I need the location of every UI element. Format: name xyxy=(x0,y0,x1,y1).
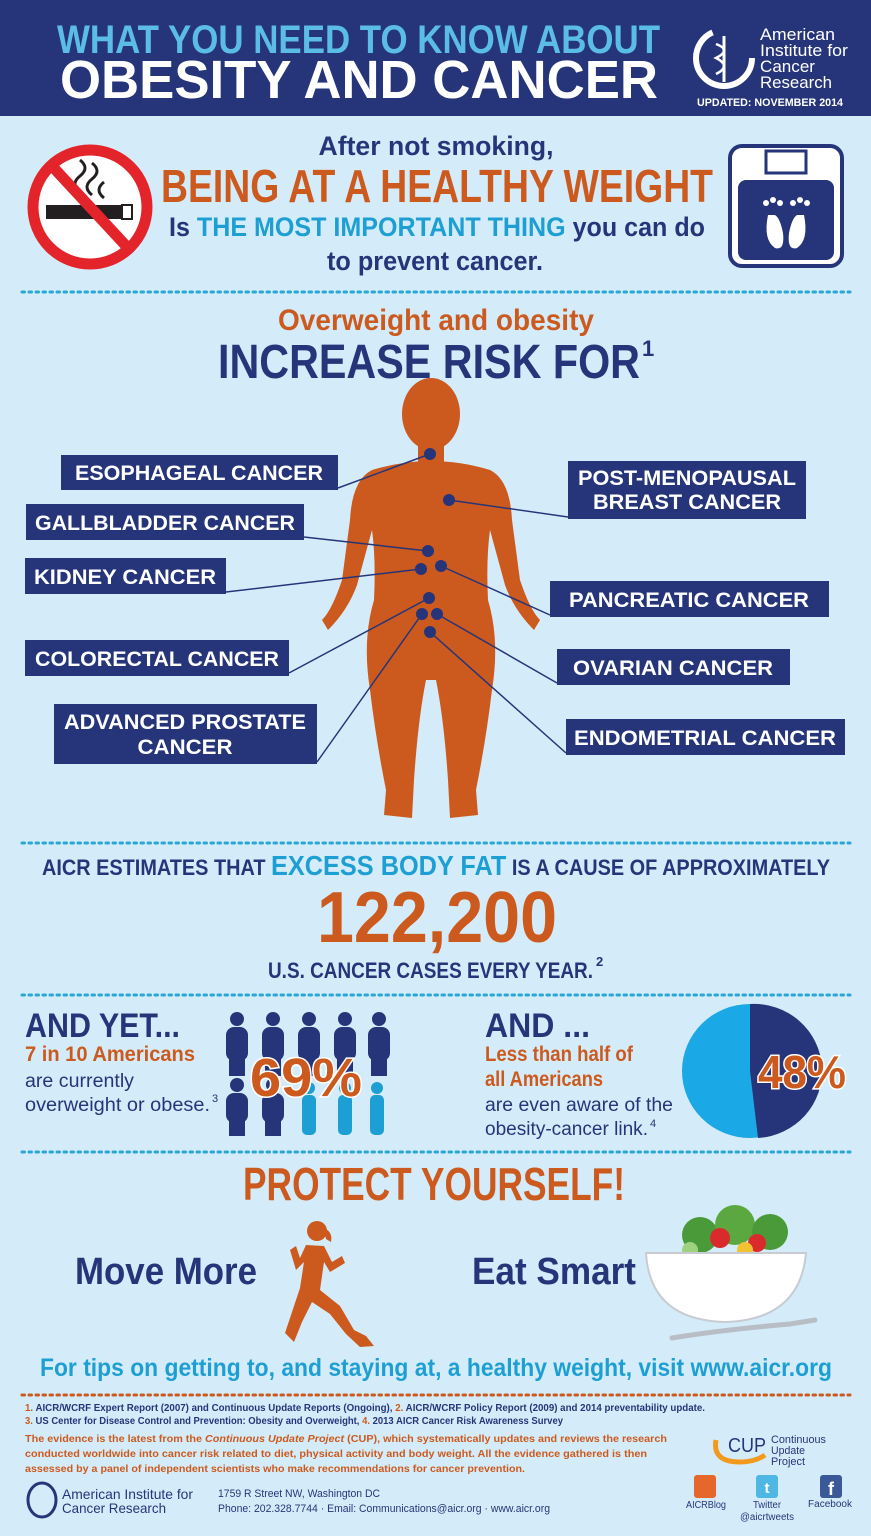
heading: increase risk xyxy=(218,304,654,389)
panel: 48% aware xyxy=(485,1004,846,1140)
footer AICR logo and address: American Institute for xyxy=(62,1486,193,1502)
connector lines xyxy=(226,454,568,762)
CUP logo: Project xyxy=(771,1456,805,1468)
label: post-menopausal breast cancer: BREAST CANCER xyxy=(593,491,781,514)
label: colorectal cancer xyxy=(25,640,289,676)
heading: protect yourself: PROTECT YOURSELF! xyxy=(243,1158,625,1210)
panel: 48% aware: AND ... xyxy=(485,1007,590,1045)
social icons: @aicrtweets xyxy=(740,1512,794,1523)
footnotes: 1. AICR/WCRF Expert Report (2007) and Continuous Update Reports (Ongoing), 2. AICR/WCRF Policy Report (2009) and 2014 preventability update. xyxy=(25,1403,705,1414)
label: advanced prostate cancer: ADVANCED PROSTATE xyxy=(64,711,306,734)
footer AICR logo and address: 1759 R Street NW, Washington DC xyxy=(218,1488,380,1500)
intro text: BEING AT A HEALTHY WEIGHT xyxy=(161,160,713,212)
intro text: Is THE MOST IMPORTANT THING you can do xyxy=(169,212,705,242)
panel: 69% overweight: 3 xyxy=(212,1093,218,1105)
label: endometrial cancer xyxy=(566,719,845,755)
pie chart: 48% xyxy=(758,1046,846,1098)
title xyxy=(57,18,660,110)
panel: 69% overweight xyxy=(25,1007,390,1136)
statistic: 122,200 cases: U.S. CANCER CASES EVERY YEAR. xyxy=(268,958,593,983)
panel: 48% aware: 4 xyxy=(650,1118,656,1130)
label: gallbladder cancer xyxy=(26,504,304,540)
heading: increase risk: Overweight and obesity xyxy=(278,304,594,337)
social icons: f xyxy=(828,1479,835,1499)
AICR logo: Institute for xyxy=(760,41,848,60)
CUP logo: Continuous xyxy=(771,1434,826,1446)
icon: scale xyxy=(730,146,842,266)
icon: no smoking xyxy=(33,150,147,264)
panel: 69% overweight: overweight or obese. xyxy=(25,1095,210,1116)
panel: 48% aware: all Americans xyxy=(485,1068,603,1091)
AICR logo: American xyxy=(760,25,835,44)
intro text xyxy=(161,131,713,276)
heading: increase risk: 1 xyxy=(642,336,654,361)
statistic: 122,200 cases xyxy=(42,850,830,983)
label: esophageal cancer: ESOPHAGEAL CANCER xyxy=(75,462,323,485)
social icons: Facebook xyxy=(808,1499,853,1510)
panel: 48% aware: obesity-cancer link. xyxy=(485,1119,648,1140)
CUP logo xyxy=(716,1434,826,1468)
icon: people grid xyxy=(226,1012,390,1136)
panel: 48% aware: are even aware of the xyxy=(485,1095,673,1116)
social icons xyxy=(686,1475,853,1523)
icon: salad bowl xyxy=(646,1205,815,1338)
footer AICR logo and address xyxy=(28,1483,550,1517)
footnotes: 3. US Center for Disease Control and Prevention: Obesity and Overweight, 4. 2013 AICR Cancer Risk Awareness Survey xyxy=(25,1416,563,1427)
panel: 69% overweight: AND YET... xyxy=(25,1007,180,1045)
label: pancreatic cancer xyxy=(550,581,829,617)
body silhouette xyxy=(322,378,540,818)
AICR logo: UPDATED: NOVEMBER 2014 xyxy=(697,97,844,109)
AICR logo: Research xyxy=(760,73,832,92)
panel: 48% aware: Less than half of xyxy=(485,1043,634,1066)
label: esophageal cancer xyxy=(61,455,338,490)
footnotes: assessed by a panel of independent scientists who make recommendations for cancer prevention. xyxy=(25,1464,525,1475)
statistic: 122,200 cases: AICR ESTIMATES THAT EXCESS BODY FAT IS A CAUSE OF APPROXIMATELY xyxy=(42,850,830,881)
label: kidney cancer: KIDNEY CANCER xyxy=(34,566,216,589)
footnotes: conducted worldwide into cancer risk related to diet, physical activity and body weight. All the evidence gathered is then xyxy=(25,1449,647,1460)
AICR logo: Cancer xyxy=(760,57,815,76)
social icons: AICRBlog xyxy=(686,1500,726,1511)
label: endometrial cancer: ENDOMETRIAL CANCER xyxy=(574,727,836,750)
social icons: Twitter xyxy=(753,1500,782,1511)
social icons: t xyxy=(764,1480,770,1497)
text: eat smart: Eat Smart xyxy=(472,1251,636,1293)
panel: 69% overweight: are currently xyxy=(25,1071,135,1092)
title: OBESITY AND CANCER xyxy=(60,50,658,110)
label: advanced prostate cancer xyxy=(54,704,317,764)
CUP logo: Update xyxy=(771,1445,805,1457)
label: advanced prostate cancer: CANCER xyxy=(138,736,232,759)
label: pancreatic cancer: PANCREATIC CANCER xyxy=(569,589,809,612)
panel: 69% overweight: 7 in 10 Americans xyxy=(25,1043,195,1066)
label: ovarian cancer: OVARIAN CANCER xyxy=(573,657,773,680)
organ dots xyxy=(415,448,455,638)
header banner xyxy=(0,0,871,116)
footnotes xyxy=(25,1403,705,1475)
footnotes: The evidence is the latest from the Continuous Update Project (CUP), which systematically updates and reviews the research xyxy=(25,1434,667,1445)
AICR logo xyxy=(696,25,848,109)
heading: increase risk: INCREASE RISK FOR xyxy=(218,336,640,389)
label: post-menopausal breast cancer: POST-MENOPAUSAL xyxy=(578,467,796,490)
label: post-menopausal breast cancer xyxy=(568,461,806,519)
label: gallbladder cancer: GALLBLADDER CANCER xyxy=(35,512,295,535)
label: ovarian cancer xyxy=(557,649,790,685)
footer AICR logo and address: Cancer Research xyxy=(62,1500,166,1516)
statistic: 122,200 cases: 2 xyxy=(596,954,603,969)
intro text: to prevent cancer. xyxy=(327,246,543,276)
label: kidney cancer xyxy=(25,558,226,594)
icon: runner xyxy=(285,1221,374,1347)
statistic: 122,200 cases: 122,200 xyxy=(317,878,557,958)
footer AICR logo and address: Phone: 202.328.7744 · Email: Communications@aicr.org · www.aicr.org xyxy=(218,1503,550,1515)
text: move more: Move More xyxy=(75,1251,257,1293)
pie chart xyxy=(682,1004,846,1138)
label: colorectal cancer: COLORECTAL CANCER xyxy=(35,648,279,671)
title: WHAT YOU NEED TO KNOW ABOUT xyxy=(57,18,660,62)
intro text: After not smoking, xyxy=(318,131,554,161)
CUP logo: CUP xyxy=(728,1435,766,1457)
icon: people grid: 69% xyxy=(250,1048,362,1108)
